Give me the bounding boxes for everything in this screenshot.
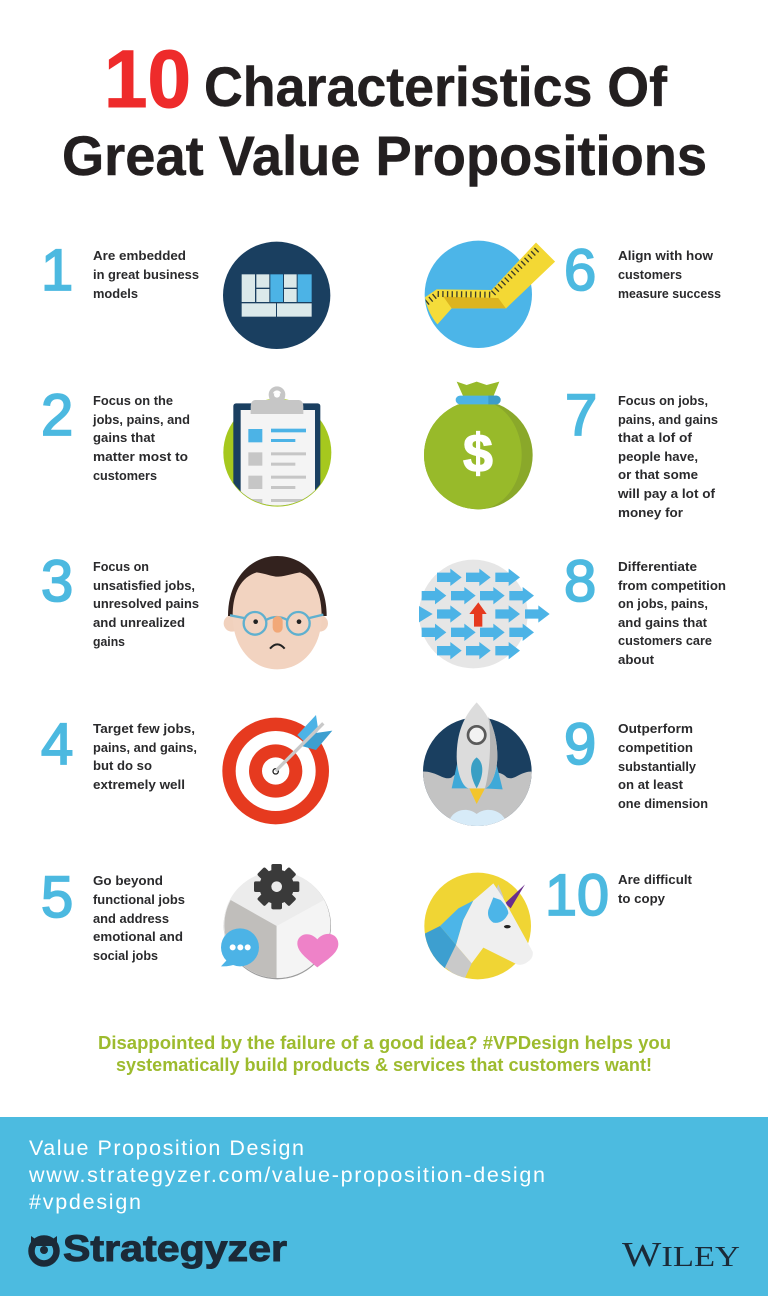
title: Great Value Propositions: [62, 124, 707, 187]
icon: money bag: $: [463, 425, 493, 484]
footer links: www.strategyzer.com/value-proposition-design: [28, 1163, 545, 1187]
number 8: 8: [564, 549, 596, 614]
text 7: people have,: [618, 449, 698, 464]
text 10: Are difficult: [618, 872, 693, 887]
panel: item 9: [420, 702, 708, 830]
text 7: pains, and gains: [618, 412, 718, 427]
number 5: 5: [41, 865, 73, 930]
panel: item 10: [424, 872, 692, 980]
icon: arrows with one red arrow: [419, 560, 550, 668]
text 1: [93, 248, 199, 301]
icon: business model canvas: [223, 242, 330, 349]
text 10: to copy: [618, 891, 666, 906]
text 7: [617, 393, 718, 520]
text 4: pains, and gains,: [93, 740, 197, 755]
footer links: Value Proposition Design: [29, 1136, 304, 1160]
text 5: Go beyond: [93, 873, 163, 888]
text 8: and gains that: [618, 615, 708, 630]
footer links: [28, 1136, 545, 1214]
text 5: functional jobs: [93, 892, 185, 907]
text 9: competition: [618, 740, 693, 755]
text 5: social jobs: [93, 948, 158, 963]
text 3: unsatisfied jobs,: [93, 578, 195, 593]
text 5: [93, 873, 185, 963]
text 7: money for: [618, 505, 683, 520]
text 8: from competition: [618, 578, 726, 593]
text 1: models: [93, 286, 138, 301]
text 1: Are embedded: [93, 248, 186, 263]
text 6: Align with how: [618, 248, 714, 263]
text 6: [618, 248, 721, 301]
text 8: [618, 559, 726, 667]
text 7: that a lof of: [618, 430, 693, 445]
panel: item 8: [419, 549, 726, 668]
number 7: 7: [565, 383, 597, 448]
text 4: extremely well: [93, 777, 185, 792]
number 9: 9: [564, 712, 596, 777]
footer links: #vpdesign: [29, 1190, 141, 1214]
text 7: Focus on jobs,: [618, 393, 708, 408]
text 3: gains: [93, 634, 125, 649]
text 8: about: [618, 652, 655, 667]
callout text: [98, 1033, 671, 1075]
panel: item 6: [423, 238, 721, 348]
footer band: [0, 1117, 768, 1296]
text 9: on at least: [618, 777, 684, 792]
text 2: Focus on the: [93, 393, 173, 408]
text 8: Differentiate: [618, 559, 697, 574]
text 4: Target few jobs,: [93, 721, 195, 736]
text 9: substantially: [618, 759, 697, 774]
icon: gear, speech bubble and heart: [221, 864, 338, 979]
text 10: [618, 872, 693, 906]
callout text: Disappointed by the failure of a good idea? #VPDesign helps you: [98, 1033, 671, 1053]
panel: item 2: [41, 383, 331, 513]
text 3: Focus on: [93, 559, 149, 574]
panel: item 4: [41, 712, 332, 824]
panel: item 5: [41, 864, 338, 979]
logo: Strategyzer: Strategyzer: [63, 1228, 287, 1269]
text 3: and unrealized: [93, 615, 185, 630]
text 9: [618, 721, 708, 811]
logo: Wiley: WILEY: [622, 1235, 740, 1274]
icon: measuring tape: [423, 241, 555, 348]
text 6: measure success: [618, 286, 721, 301]
icon: rocket: [420, 702, 537, 830]
panel: item 1: [41, 238, 330, 349]
text 3: [93, 559, 199, 649]
text 4: but do so: [93, 758, 152, 773]
icon: money bag: [424, 382, 533, 509]
number 3: 3: [41, 549, 73, 614]
icon: target with arrow: [222, 715, 332, 824]
text 7: or that some: [618, 467, 698, 482]
number 6: 6: [564, 238, 596, 303]
text 2: [92, 393, 190, 483]
number 2: 2: [41, 383, 73, 448]
text 2: customers: [93, 468, 157, 483]
text 2: gains that: [93, 430, 156, 445]
text 8: customers care: [618, 633, 712, 648]
text 5: and address: [93, 911, 169, 926]
text 1: in great business: [93, 267, 199, 282]
title: [62, 34, 707, 187]
number 10: 10: [545, 863, 609, 928]
panel: item 3: [41, 549, 328, 669]
title: 10: [104, 34, 191, 125]
icon: frowning face: [224, 556, 328, 669]
text 7: will pay a lot of: [617, 486, 716, 501]
callout text: systematically build products & services that customers want!: [116, 1055, 652, 1075]
number 1: 1: [41, 238, 73, 303]
text 9: one dimension: [618, 796, 708, 811]
text 5: emotional and: [93, 929, 183, 944]
text 8: on jobs, pains,: [618, 596, 708, 611]
text 4: [93, 721, 197, 792]
text 2: matter most to: [93, 449, 188, 464]
icon: clipboard: [223, 388, 331, 513]
text 9: Outperform: [618, 721, 693, 736]
text 6: customers: [618, 267, 682, 282]
icon: unicorn: [420, 873, 533, 982]
number 4: 4: [41, 712, 73, 777]
text 3: unresolved pains: [93, 596, 199, 611]
text 2: jobs, pains, and: [92, 412, 190, 427]
title: Characteristics Of: [204, 55, 667, 118]
panel: item 7: [424, 382, 718, 520]
